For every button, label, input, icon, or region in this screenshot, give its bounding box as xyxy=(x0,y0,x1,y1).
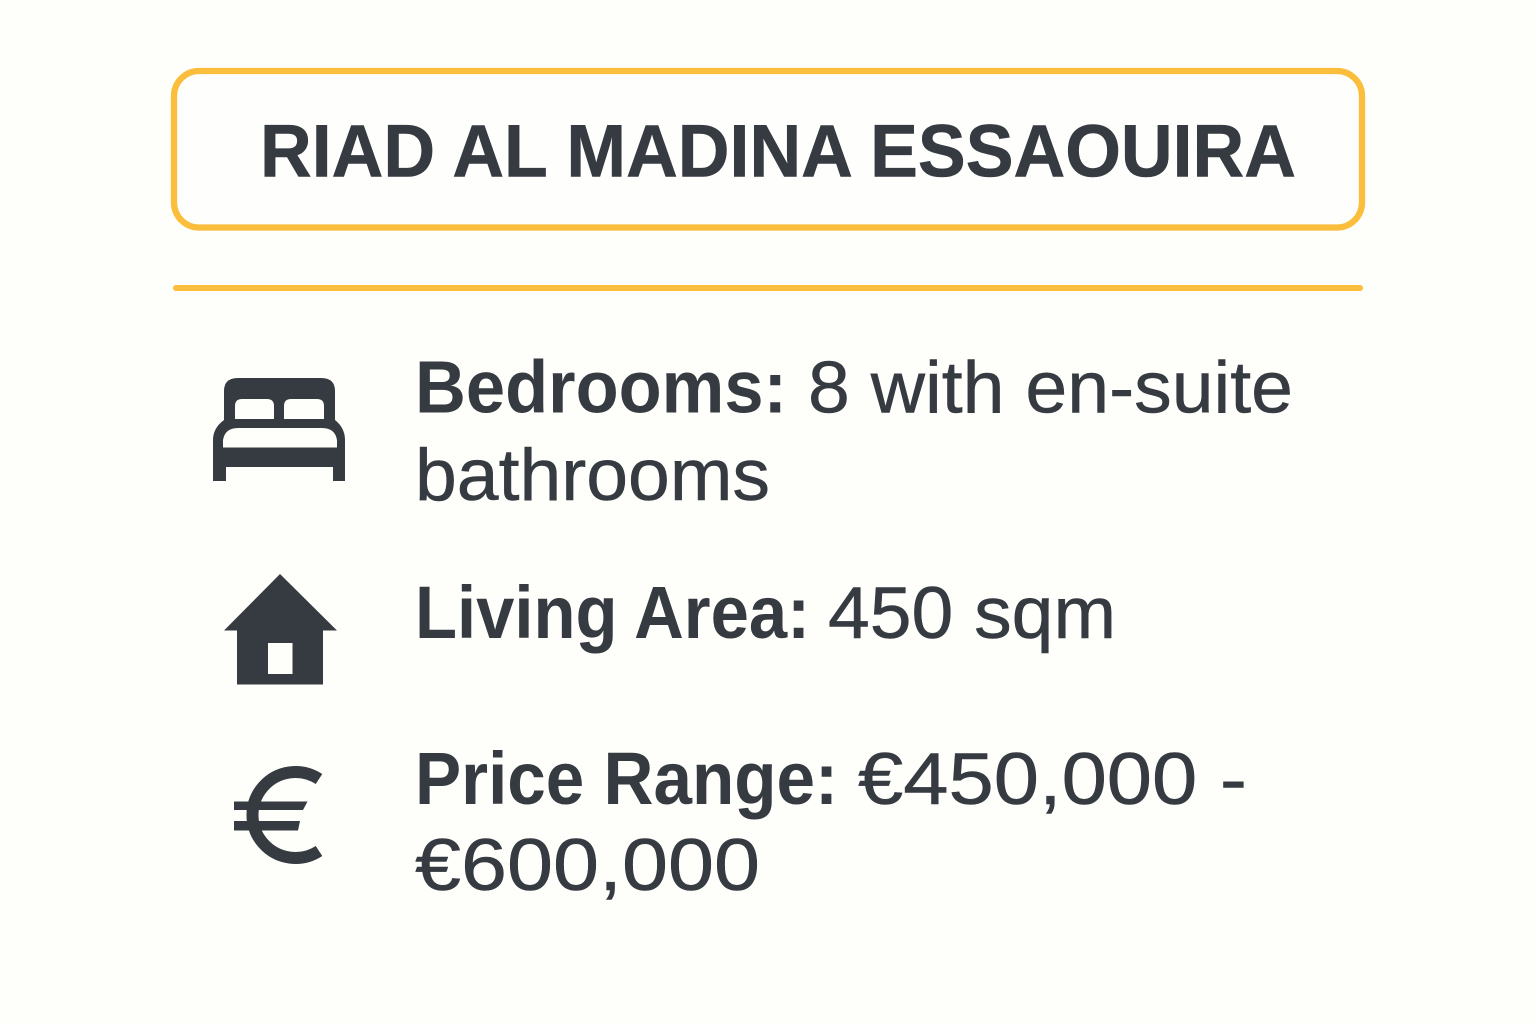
price range text: Price Range: xyxy=(415,737,838,820)
living area text: 450 sqm xyxy=(828,573,1116,654)
bedrooms text: bathrooms xyxy=(415,435,770,516)
living area text: Living Area: xyxy=(415,571,810,654)
bedrooms text xyxy=(415,346,1293,516)
title: RIAD AL MADINA ESSAOUIRA xyxy=(260,110,1296,192)
living area text xyxy=(415,571,1116,654)
icon: bed xyxy=(213,378,345,481)
price range text: €450,000 - xyxy=(858,739,1247,820)
icon: house xyxy=(224,574,337,684)
bedrooms text: Bedrooms: xyxy=(415,346,787,428)
price range text xyxy=(415,737,1247,906)
title box xyxy=(174,71,1362,228)
icon: euro xyxy=(234,772,319,858)
bedrooms text: 8 with en-suite xyxy=(808,348,1293,428)
price range text: €600,000 xyxy=(415,825,760,906)
